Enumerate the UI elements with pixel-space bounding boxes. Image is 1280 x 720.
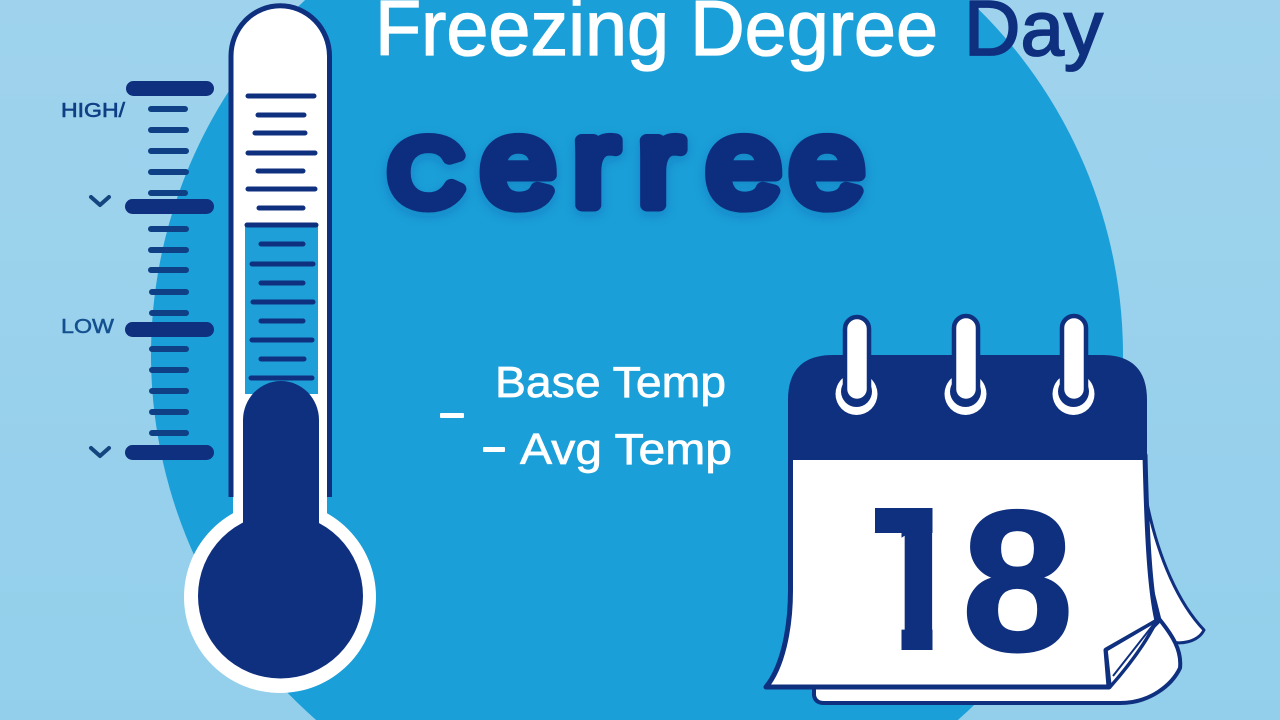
inner ticks [247, 96, 316, 378]
thermometer [184, 6, 376, 693]
heading: Cerree: C [389, 120, 463, 225]
background circle [151, 0, 1123, 720]
heading: Cerree: r [638, 96, 683, 232]
header band [788, 355, 1147, 460]
back sheet bottom [814, 620, 1180, 703]
blue liquid [245, 224, 318, 394]
page curl [1106, 620, 1157, 687]
bulb white ring [184, 501, 376, 693]
heading: Cerree: e [481, 96, 556, 232]
icon: chevron upper [91, 197, 109, 205]
scale: external ticks and labels [61, 81, 214, 460]
binder rings [836, 316, 1094, 415]
label: HIGH: HIGH/ [61, 100, 126, 122]
heading: Cerree: e [707, 96, 781, 232]
major ticks [125, 81, 214, 460]
bulb [198, 514, 363, 678]
heading: Cerree: e [790, 96, 864, 232]
mercury column [243, 381, 319, 530]
label: LOW: LOW [61, 316, 114, 338]
minus sign and label: Avg Temp: Avg Temp [520, 425, 732, 474]
minus sign [440, 413, 464, 418]
calendar [766, 316, 1204, 703]
front page [766, 455, 1157, 687]
back sheet right [1145, 498, 1204, 643]
tube outline [231, 6, 330, 497]
formula labels [440, 358, 732, 474]
date number [858, 470, 1073, 693]
label: Base Temp: Base Temp [495, 358, 726, 407]
minor ticks [151, 109, 186, 433]
icon: chevron lower [91, 448, 109, 456]
date number: 1 [858, 470, 969, 693]
date number: 8 [962, 470, 1073, 693]
tube glass [233, 8, 327, 530]
heading: Cerree: r [573, 96, 618, 232]
